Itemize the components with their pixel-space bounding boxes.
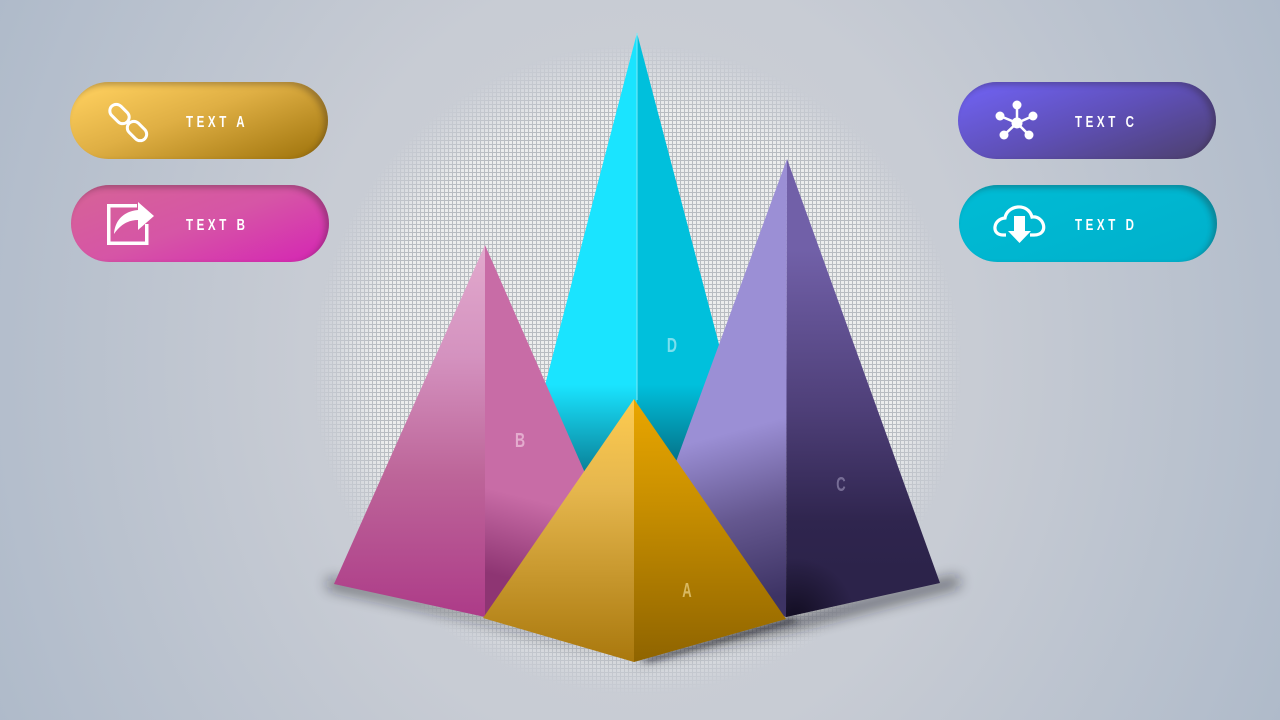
pyramid A (gold)	[483, 399, 786, 662]
icon: cloud download	[993, 205, 1046, 243]
label: TEXT A: TEXT A	[186, 114, 248, 131]
pyramid C (purple)	[640, 159, 940, 617]
label: TEXT C: TEXT C	[1075, 114, 1138, 131]
label: TEXT B: TEXT B	[186, 217, 249, 234]
ground shadow	[328, 576, 960, 662]
pill: Text D	[959, 185, 1217, 262]
icon: chain link	[108, 102, 148, 142]
pyramid D (cyan)	[515, 33, 760, 500]
pill: Text A	[70, 82, 328, 159]
label D: D	[667, 333, 677, 357]
background dot grid	[327, 62, 947, 678]
label A: A	[682, 579, 692, 602]
pill: Text B	[71, 185, 329, 262]
label C: C	[836, 473, 846, 496]
icon: network nodes	[996, 100, 1038, 140]
icon: share arrow	[107, 202, 154, 245]
label: TEXT D: TEXT D	[1075, 217, 1138, 234]
pyramid B (pink)	[334, 245, 610, 617]
pill: Text C	[958, 82, 1216, 159]
label B: B	[515, 428, 525, 452]
